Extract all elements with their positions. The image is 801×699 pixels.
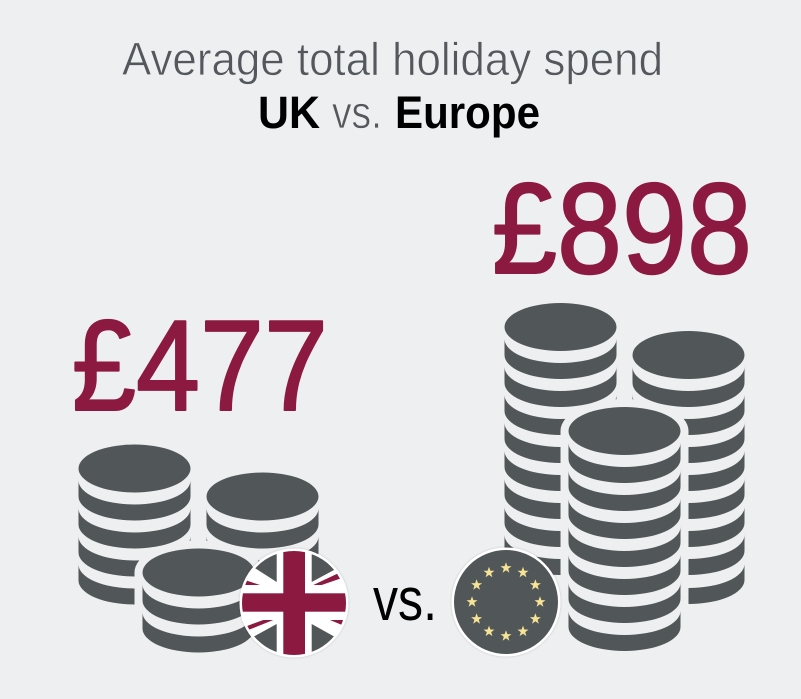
title line 1: Average total holiday spend <box>122 33 663 85</box>
coin stack: UK left <box>78 444 190 604</box>
UK coin stacks <box>78 444 318 660</box>
title line 2: UK <box>258 87 320 138</box>
Europe amount: £898 <box>492 157 752 301</box>
UK amount: £477 <box>72 294 328 438</box>
icon: EU flag <box>452 548 560 656</box>
coin stack: UK front <box>134 540 262 660</box>
coin stack: Europe front <box>560 399 688 660</box>
title line 2: vs. <box>332 87 382 138</box>
coin stack: Europe left <box>504 303 616 575</box>
vs. label: vs. <box>373 566 437 633</box>
title line 2 <box>258 87 540 138</box>
Europe coin stacks <box>504 303 744 660</box>
icon: UK flag <box>238 545 350 660</box>
title <box>122 33 663 138</box>
title line 2: Europe <box>395 87 540 138</box>
coin stack: Europe right <box>632 331 744 604</box>
coin stack: UK right <box>206 472 318 576</box>
